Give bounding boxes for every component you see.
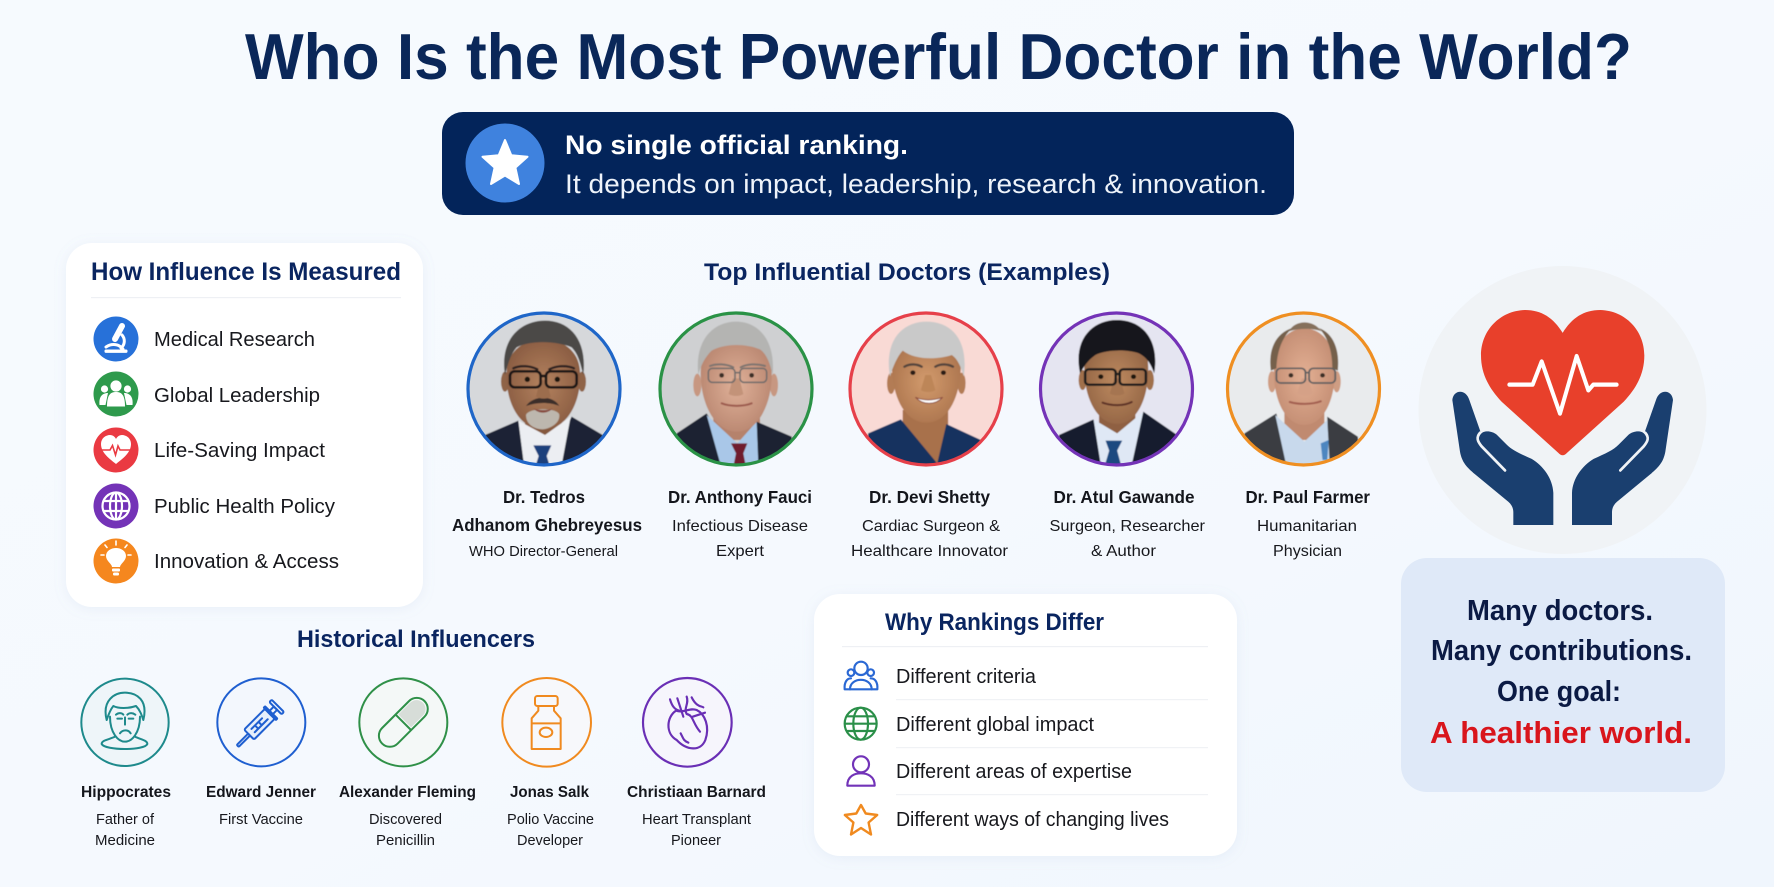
callout: a healthier world — [1401, 558, 1725, 792]
influencer: Alexander Fleming — [339, 678, 476, 849]
doctor name and role: Dr. Atul Gawande — [1054, 487, 1195, 507]
item: medical research — [94, 316, 315, 362]
influencer: Edward Jenner: First Vaccine — [219, 811, 303, 828]
item: life-saving impact — [94, 428, 325, 472]
title: Who Is the Most Powerful Doctor in the World? — [245, 20, 1632, 93]
item: different areas of expertise: Different areas of expertise — [896, 761, 1132, 783]
influencer: Hippocrates — [81, 679, 171, 849]
doctor name and role: Infectious Disease — [672, 518, 808, 535]
item: public health policy — [94, 484, 336, 528]
item: different areas of expertise — [847, 756, 1132, 786]
influencer: Edward Jenner — [206, 678, 316, 828]
icon: vaccine vial — [502, 678, 591, 767]
item: different criteria — [845, 662, 1037, 689]
heading: why rankings differ: Why Rankings Differ — [885, 609, 1104, 636]
doctor name and role: Cardiac Surgeon & — [862, 518, 1000, 535]
item: different global impact: Different global impact — [896, 714, 1094, 736]
doctor name and role: Dr. Paul Farmer — [1246, 487, 1370, 507]
doctor name and role — [668, 487, 812, 560]
doctor name and role — [1246, 487, 1370, 560]
icon: Hippocrates head — [81, 679, 169, 766]
doctor name and role: Expert — [716, 543, 765, 560]
callout: a healthier world: Many contributions. — [1431, 635, 1692, 667]
item: global leadership: Global Leadership — [154, 384, 320, 407]
banner text: It depends on impact, leadership, research & innovation. — [565, 169, 1267, 199]
doctor: Gawande — [1034, 310, 1206, 560]
item: different ways of changing lives — [845, 805, 1169, 834]
influencer: Edward Jenner: Edward Jenner — [206, 784, 316, 801]
influencer: Christiaan Barnard: Pioneer — [671, 832, 721, 849]
left hand — [1452, 392, 1553, 525]
doctor name and role: Dr. Tedros — [503, 487, 585, 507]
right hand — [1572, 392, 1673, 525]
doctor name and role — [851, 487, 1009, 560]
doctor: Shetty — [848, 311, 1008, 556]
banner text — [565, 130, 1267, 199]
item: life-saving impact: Life-Saving Impact — [154, 439, 325, 462]
influencer: Jonas Salk: Polio Vaccine — [507, 811, 594, 828]
influencer: Alexander Fleming: Penicillin — [376, 832, 435, 849]
influencer: Christiaan Barnard — [627, 678, 766, 849]
icon: syringe — [217, 678, 305, 766]
doctor name and role: & Author — [1091, 543, 1157, 560]
portrait: Shetty — [848, 311, 1004, 467]
influencer: Christiaan Barnard: Christiaan Barnard — [627, 784, 766, 801]
panel: how influence is measured — [66, 243, 423, 607]
doctor name and role — [1050, 487, 1206, 560]
heading: how influence is measured: How Influence Is Measured — [91, 258, 401, 286]
item: different ways of changing lives: Different ways of changing lives — [896, 809, 1169, 831]
section heading: historical influencers: Historical Influencers — [297, 626, 535, 653]
doctor name and role: Adhanom Ghebreyesus — [452, 515, 642, 535]
item: innovation and access — [94, 538, 339, 584]
doctor name and role: Dr. Anthony Fauci — [668, 487, 812, 507]
portrait: Fauci — [657, 310, 820, 473]
section heading: top influential doctors: Top Influential Doctors (Examples) — [704, 259, 1110, 286]
influencer: Alexander Fleming: Discovered — [369, 811, 442, 828]
doctor name and role: WHO Director-General — [469, 543, 618, 560]
icon: star badge — [466, 124, 544, 202]
item: different criteria: Different criteria — [896, 666, 1037, 688]
doctor name and role: Dr. Devi Shetty — [869, 487, 990, 507]
doctor name and role: Humanitarian — [1257, 518, 1357, 535]
item: innovation and access: Innovation & Access — [154, 550, 339, 573]
portrait: Gawande — [1038, 311, 1194, 467]
callout: a healthier world: Many doctors. — [1467, 595, 1653, 627]
influencer: Jonas Salk: Jonas Salk — [510, 784, 589, 801]
influencer: Jonas Salk: Developer — [517, 832, 583, 849]
influencer: Hippocrates: Father of — [96, 811, 155, 828]
doctor name and role: Healthcare Innovator — [851, 543, 1009, 560]
doctor: Tedros — [452, 310, 642, 560]
icon: hands holding heart — [1418, 266, 1706, 554]
doctor name and role — [452, 487, 642, 560]
portrait: Farmer — [1223, 310, 1386, 473]
callout banner: no single official ranking — [442, 112, 1294, 215]
doctor: Fauci — [657, 310, 820, 560]
doctor name and role: Surgeon, Researcher — [1050, 518, 1206, 535]
icon: pill capsule — [359, 678, 447, 766]
influencer: Christiaan Barnard: Heart Transplant — [642, 811, 752, 828]
doctor name and role: Physician — [1273, 543, 1342, 560]
item: public health policy: Public Health Policy — [154, 495, 336, 518]
doctor: Farmer — [1223, 310, 1386, 560]
callout: a healthier world: One goal: — [1497, 676, 1621, 708]
panel: why rankings differ — [814, 594, 1237, 856]
callout: a healthier world: A healthier world. — [1430, 715, 1692, 750]
influencer: Hippocrates: Medicine — [95, 832, 155, 849]
icon: anatomical heart — [643, 678, 732, 767]
item: global leadership — [94, 372, 320, 416]
banner text: No single official ranking. — [565, 130, 908, 160]
influencer: Hippocrates: Hippocrates — [81, 784, 171, 801]
influencer: Jonas Salk — [502, 678, 594, 849]
item: different global impact — [845, 708, 1094, 740]
heart with pulse — [1481, 310, 1644, 455]
item: medical research: Medical Research — [154, 328, 315, 351]
portrait: Tedros — [463, 310, 627, 473]
influencer: Alexander Fleming: Alexander Fleming — [339, 784, 476, 801]
